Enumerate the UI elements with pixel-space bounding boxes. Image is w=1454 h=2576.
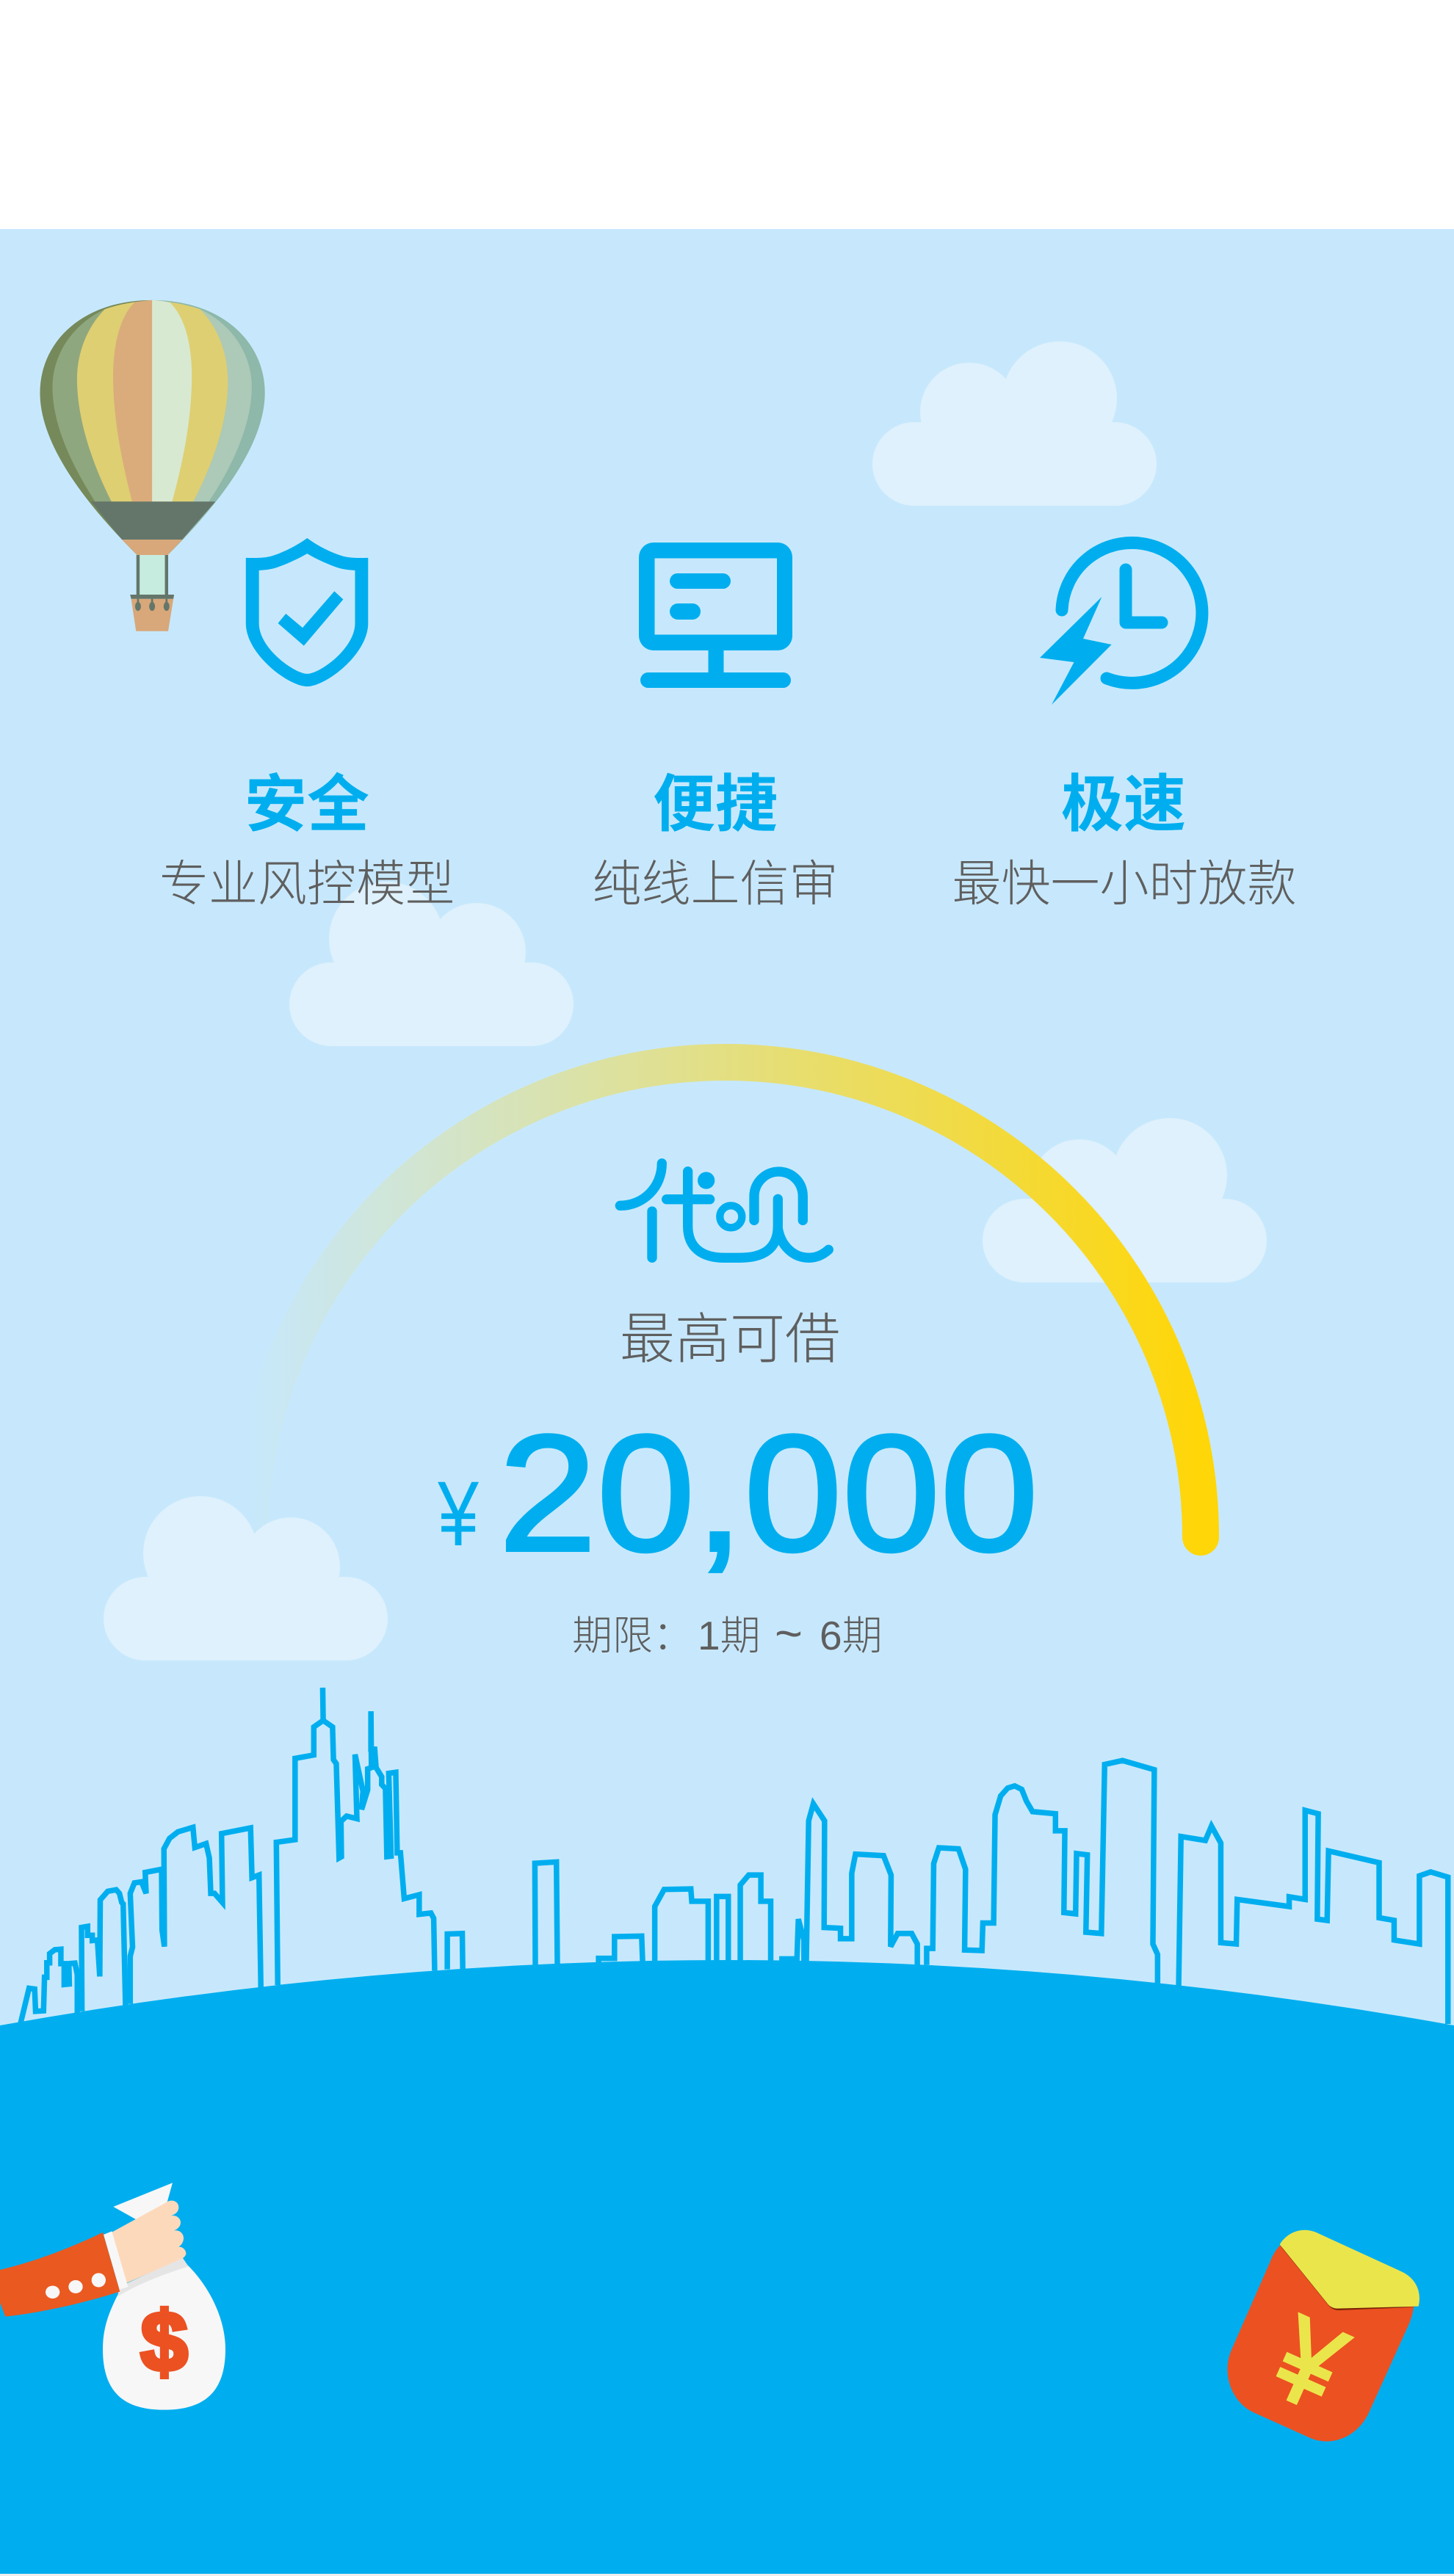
icon: money bag held by hand — [0, 2183, 225, 2410]
cloud middle right — [983, 1118, 1267, 1282]
subtext: fast: 最快一小时放款 — [952, 857, 1297, 912]
logo — [620, 1164, 828, 1258]
hot air balloon — [40, 300, 265, 631]
term range: 6期 — [820, 1613, 883, 1658]
subtext: safe: 专业风控模型 — [159, 857, 455, 912]
yen sign: ¥ — [1255, 2291, 1362, 2437]
cloud middle left — [289, 882, 574, 1046]
label: max borrow: 最高可借 — [620, 1308, 840, 1370]
heading: convenient: 便捷 — [653, 770, 778, 840]
icon: red packet — [1227, 2230, 1419, 2442]
heading: safe: 安全 — [245, 770, 369, 840]
heading: fast: 极速 — [1061, 770, 1186, 840]
blue ground — [0, 1960, 1454, 2574]
term range: 期限： — [572, 1613, 693, 1658]
city skyline right — [740, 1760, 1448, 2024]
term range: 1期 — [698, 1613, 761, 1658]
gradient arc gauge — [250, 1062, 1201, 1537]
cloud top right — [872, 341, 1157, 506]
currency symbol: ¥ — [437, 1462, 480, 1565]
subtext: convenient: 纯线上信审 — [592, 857, 839, 912]
cloud lower left — [104, 1496, 388, 1661]
dollar sign: $ — [141, 2295, 188, 2389]
amount: 20,000 — [499, 1400, 1038, 1586]
icon: shield — [246, 538, 368, 686]
city skyline left — [21, 1688, 728, 2023]
icon: clock with lightning — [1040, 543, 1202, 705]
icon: monitor — [639, 543, 792, 688]
term range: ~ — [775, 1606, 803, 1660]
